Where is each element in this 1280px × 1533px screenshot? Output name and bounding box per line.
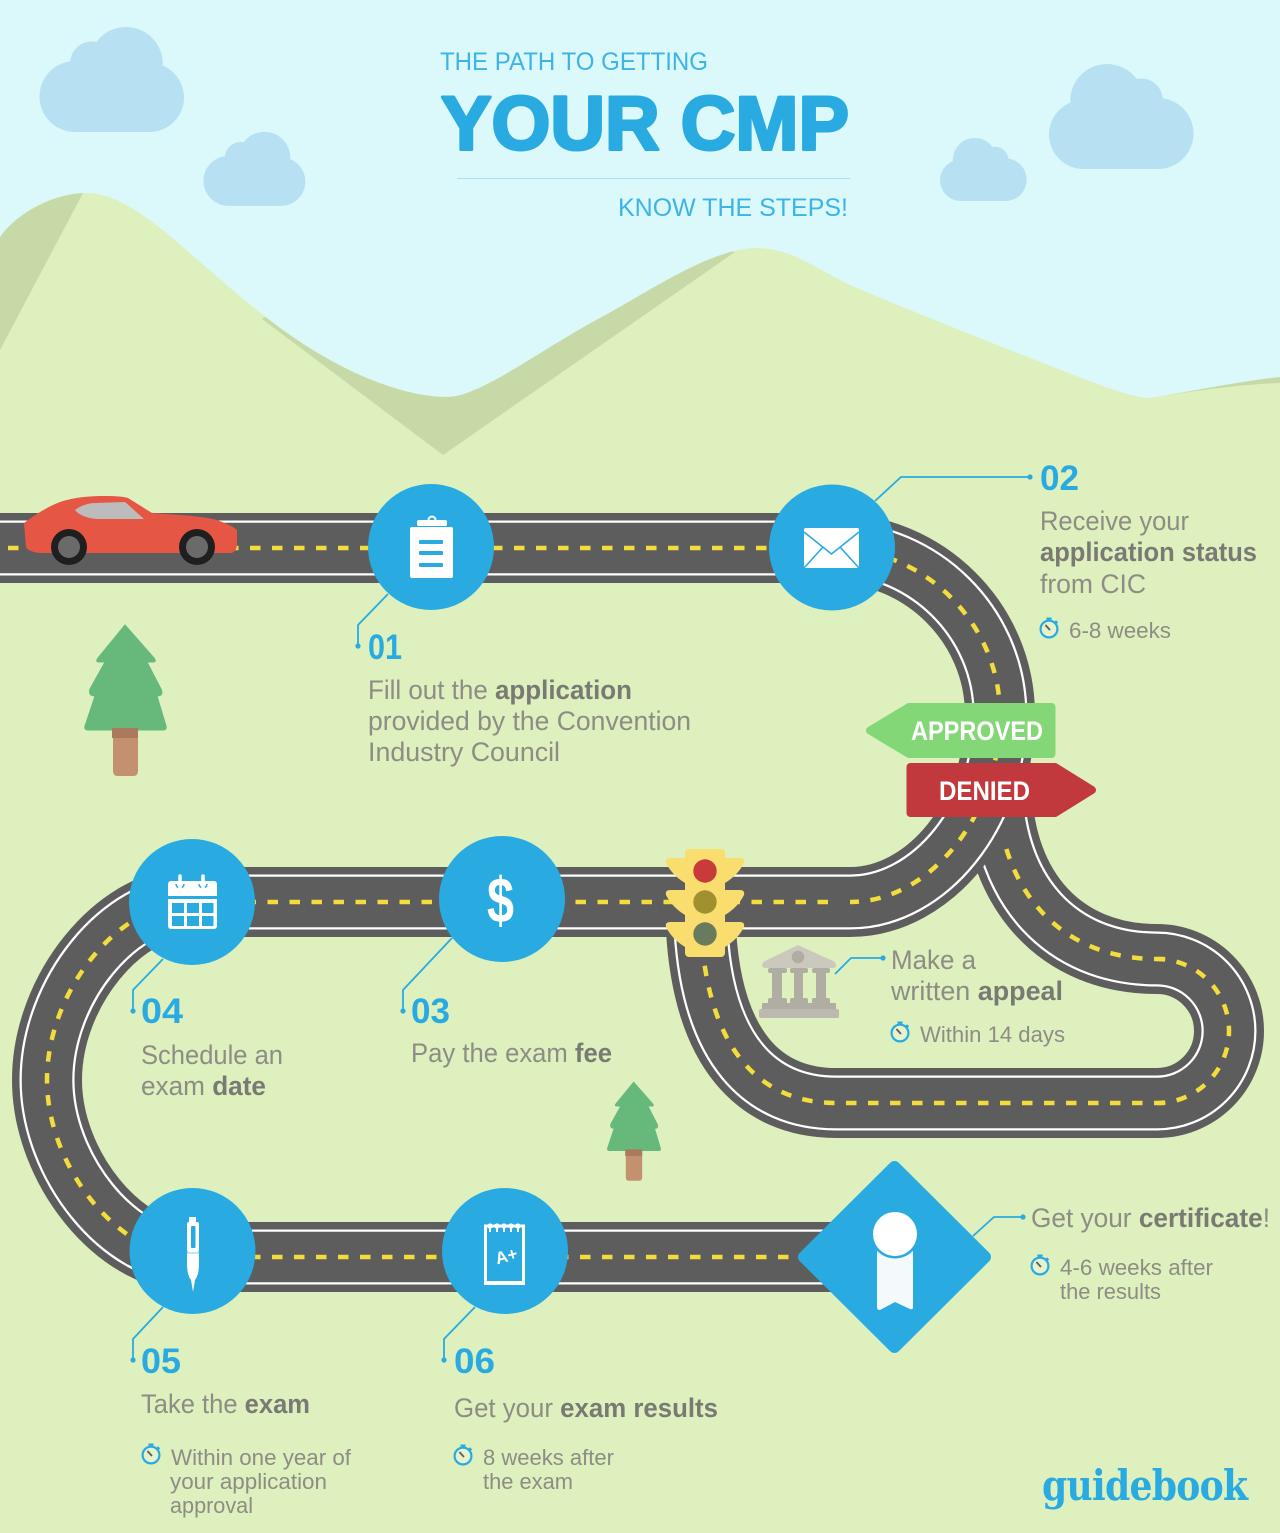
step 2 text: 6-8 weeks [1069,618,1171,643]
step 1 text: provided by the Convention [368,706,691,736]
step 2 icon: envelope [769,484,895,610]
step 2 text: application status [1040,537,1257,567]
appeal text: Within 14 days [920,1022,1065,1047]
sign: denied [910,767,1092,813]
step 5 icon: pen [130,1188,256,1314]
step 1 text: 01 [368,628,402,667]
step 5 text: approval [170,1493,253,1518]
guidebook logo: guidebook [1042,1461,1249,1511]
road: main route [0,548,1000,1257]
appeal text: Make a [891,945,977,975]
step 6 text: Get your exam results [454,1393,718,1423]
step 1 icon: clipboard [368,484,494,610]
step 4 text [141,992,283,1101]
step 2 text: from CIC [1040,569,1146,599]
step 5 text [141,1342,352,1518]
certificate text: 4-6 weeks after [1060,1255,1213,1280]
certificate diamond with ribbon [804,1167,985,1347]
step 3 icon: dollar [439,836,565,962]
certificate text: Get your certificate! [1031,1203,1270,1233]
title: KNOW THE STEPS! [618,194,848,222]
step 5 text: 05 [141,1342,181,1381]
step 4 text: exam date [141,1071,266,1101]
sign: denied: DENIED [939,776,1030,806]
step 4 text: 04 [141,992,184,1031]
step 2 text [1040,459,1257,643]
sign: approved: APPROVED [911,716,1043,746]
step 6 icon: notepad [442,1188,568,1314]
tree: left [85,625,166,776]
title [440,48,850,222]
step 3 text [411,992,612,1068]
step 3 text: Pay the exam fee [411,1038,612,1068]
step 6 text: 06 [454,1342,495,1381]
tree: centre [607,1082,661,1181]
icon: courthouse [759,945,839,1018]
step 1 text [368,628,691,767]
road: appeal branch [701,790,1229,1103]
step 1 text: Industry Council [368,737,560,767]
title: YOUR CMP [441,82,849,166]
step 1 text: Fill out the application [368,675,632,705]
step 6 text: 8 weeks after [483,1445,614,1470]
appeal text: written appeal [890,976,1063,1006]
step 3 icon: dollar: $ [487,864,514,936]
step 6 icon: notepad: A+ [493,1244,520,1268]
clouds [40,27,1194,206]
certificate text [1031,1203,1270,1304]
step 5 text: Within one year of [171,1445,352,1470]
title: THE PATH TO GETTING [440,48,708,76]
car [24,496,237,565]
connector lines [130,474,1033,1363]
step 5 text: Take the exam [141,1389,310,1419]
traffic light [666,849,744,957]
step 2 text: 02 [1040,459,1079,498]
step 3 text: 03 [411,992,450,1031]
appeal text [890,945,1065,1047]
step 4 icon: calendar [129,839,255,965]
certificate text: the results [1060,1279,1161,1304]
step 5 text: your application [170,1469,327,1494]
step 2 text: Receive your [1040,506,1189,536]
step 4 text: Schedule an [141,1040,283,1070]
sign: approved [870,707,1052,754]
step 6 text [454,1342,718,1494]
step 6 text: the exam [483,1469,573,1494]
